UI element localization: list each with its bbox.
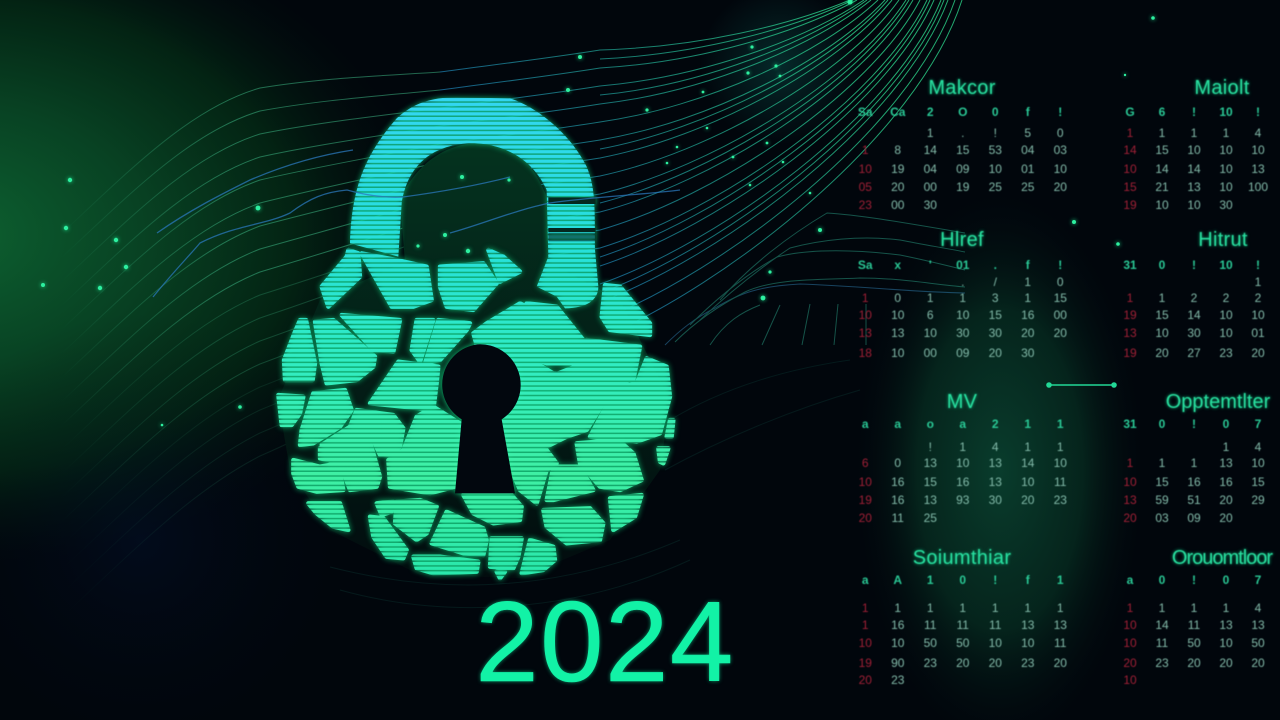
calendar panel: top right: 15 bbox=[1123, 180, 1137, 194]
calendar panel: bottom right: 10 bbox=[1219, 636, 1233, 650]
calendar panel: second row left: 30 bbox=[956, 326, 969, 340]
calendar panel: bottom right: 0 bbox=[1159, 573, 1165, 587]
calendar panel: top left: 5 bbox=[1024, 126, 1031, 140]
second line bundle near the pinch point bbox=[665, 213, 965, 345]
calendar panel: bottom left: 20 bbox=[989, 656, 1002, 670]
calendar panel: top right: 14 bbox=[1155, 162, 1169, 176]
dark backing inside the padlock bbox=[278, 143, 670, 578]
calendar panel: top left: Sa bbox=[858, 105, 873, 119]
calendar panel: bottom right: 10 bbox=[1123, 618, 1137, 632]
calendar panel: top left: 00 bbox=[924, 180, 937, 194]
calendar panel: third row left: a bbox=[894, 417, 901, 431]
calendar panel: top left: 1 bbox=[862, 143, 869, 157]
calendar panel: bottom right: 10 bbox=[1123, 673, 1137, 687]
calendar panel: second row right: 1 bbox=[1127, 291, 1133, 305]
calendar panel: third row left: 25 bbox=[924, 511, 937, 525]
calendar panel: second row left: 16 bbox=[1021, 308, 1034, 322]
calendar panel: third row right: 03 bbox=[1155, 511, 1169, 525]
calendar panel: second row right: 19 bbox=[1123, 346, 1137, 360]
padlock body shards bbox=[278, 250, 673, 578]
calendar panel: second row right: 2 bbox=[1255, 291, 1261, 305]
calendar panel: third row right: 15 bbox=[1155, 475, 1169, 489]
calendar panel: bottom right: 13 bbox=[1251, 618, 1265, 632]
calendar panel: second row left: 13 bbox=[891, 326, 904, 340]
calendar panel: second row left: 20 bbox=[1054, 326, 1067, 340]
calendar panel: top left: . bbox=[961, 126, 964, 140]
calendar panel: second row left: 0 bbox=[1057, 275, 1064, 289]
calendar panel: second row left: 18 bbox=[859, 346, 872, 360]
calendar panel: top left: 53 bbox=[989, 143, 1002, 157]
day grid bbox=[858, 105, 1068, 212]
calendar panel: third row left: 13 bbox=[989, 456, 1002, 470]
calendar panel: second row left: 0 bbox=[894, 291, 901, 305]
calendar panel: top left: 8 bbox=[894, 143, 901, 157]
calendar panel: second row right: 1 bbox=[1255, 275, 1261, 289]
calendar panel: top left: 09 bbox=[956, 162, 969, 176]
calendar panel: top right: 4 bbox=[1255, 126, 1261, 140]
calendar panel: second row left: 1 bbox=[927, 291, 934, 305]
calendar panel: second row left: 15 bbox=[1054, 291, 1067, 305]
calendar panel: second row left: 10 bbox=[924, 326, 937, 340]
calendar panel: third row left: 15 bbox=[924, 475, 937, 489]
calendar panel: bottom right: 23 bbox=[1155, 656, 1169, 670]
day grid bbox=[858, 573, 1068, 687]
year heading: 2024 bbox=[475, 579, 735, 706]
calendar panel: third row left: 10 bbox=[956, 456, 969, 470]
calendar panel: second row right: 10 bbox=[1219, 326, 1233, 340]
calendar panel: second row left: / bbox=[994, 275, 997, 289]
calendar panel: second row left: 6 bbox=[927, 308, 934, 322]
calendar panel: top right: 14 bbox=[1187, 162, 1201, 176]
calendar panel: second row left: 1 bbox=[1024, 291, 1031, 305]
calendar panel: third row left: 14 bbox=[1021, 456, 1034, 470]
calendar panel: bottom left: 23 bbox=[891, 673, 904, 687]
calendar panel: second row left: . bbox=[994, 258, 997, 272]
calendar panel: third row right: 1 bbox=[1223, 440, 1229, 454]
calendar panel: bottom left: 20 bbox=[1054, 656, 1067, 670]
calendar panel: bottom right: 20 bbox=[1187, 656, 1201, 670]
calendar panel: top right: 6 bbox=[1159, 105, 1165, 119]
calendar panel: second row left: Sa bbox=[858, 258, 873, 272]
calendar panel: second row right: 15 bbox=[1155, 308, 1169, 322]
calendar panel: third row left: 1 bbox=[1024, 440, 1031, 454]
calendar panel: bottom left: 10 bbox=[859, 636, 872, 650]
calendar panel: third row right: 16 bbox=[1187, 475, 1201, 489]
calendar panel: bottom left: 20 bbox=[859, 673, 872, 687]
calendar panel: top right: 1 bbox=[1127, 126, 1133, 140]
calendar panel: top left: 10 bbox=[989, 162, 1002, 176]
calendar panel: top left: 25 bbox=[1021, 180, 1034, 194]
calendar panel: top right: 10 bbox=[1155, 198, 1169, 212]
calendar panel: second row left: 10 bbox=[891, 308, 904, 322]
calendar panel: top left: ! bbox=[994, 126, 997, 140]
calendar panel: bottom right: 13 bbox=[1219, 618, 1233, 632]
calendar panel: third row right: 15 bbox=[1251, 475, 1265, 489]
calendar panel: top right: ! bbox=[1256, 105, 1260, 119]
calendar panel: bottom right: 50 bbox=[1187, 636, 1201, 650]
calendar panel: third row left: 10 bbox=[1054, 456, 1067, 470]
calendar panel: top left: Ca bbox=[890, 105, 905, 119]
calendar panel: second row right: 0 bbox=[1159, 258, 1165, 272]
calendar panel: bottom left: 0 bbox=[959, 573, 966, 587]
calendar panel: bottom left: 1 bbox=[1057, 601, 1064, 615]
calendar panel: bottom right: 7 bbox=[1255, 573, 1261, 587]
calendar panel: bottom left: 13 bbox=[1054, 618, 1067, 632]
calendar panel: bottom left: 1 bbox=[927, 601, 934, 615]
calendar panel: third row left: 16 bbox=[891, 475, 904, 489]
calendar panel: second row right: 01 bbox=[1251, 326, 1265, 340]
calendar panel: second row left: 10 bbox=[956, 308, 969, 322]
calendar panel: top right: 10 bbox=[1123, 162, 1137, 176]
calendar panel: third row right: 1 bbox=[1159, 456, 1165, 470]
calendar panel: top right: 10 bbox=[1219, 105, 1233, 119]
calendar panel: top right: 10 bbox=[1219, 143, 1233, 157]
calendar panel: third row left: o bbox=[927, 417, 934, 431]
calendar panel: third row left: 30 bbox=[989, 493, 1002, 507]
calendar panel: second row right: ! bbox=[1256, 258, 1260, 272]
calendar panel: second row right: 30 bbox=[1187, 326, 1201, 340]
calendar panel: third row left: 11 bbox=[1054, 475, 1066, 489]
calendar panel: bottom left: 11 bbox=[957, 618, 969, 632]
calendar panel: third row left: 93 bbox=[956, 493, 969, 507]
month title: MV bbox=[947, 391, 977, 413]
calendar panel: top left: 05 bbox=[859, 180, 872, 194]
calendar panel: second row left: 20 bbox=[989, 346, 1002, 360]
calendar panel: top right: 100 bbox=[1248, 180, 1268, 194]
calendar panel: third row right: 7 bbox=[1255, 417, 1261, 431]
calendar panel: third row right: 4 bbox=[1255, 440, 1261, 454]
calendar panel: bottom right: 4 bbox=[1255, 601, 1261, 615]
calendar panel: bottom right: 11 bbox=[1156, 636, 1168, 650]
calendar panel: second row right: 20 bbox=[1155, 346, 1169, 360]
calendar panel: third row left: 13 bbox=[924, 493, 937, 507]
month title: Hlref bbox=[940, 229, 984, 251]
day grid bbox=[1123, 417, 1265, 525]
calendar panel: third row left: 4 bbox=[992, 440, 999, 454]
calendar panel: third row right: 1 bbox=[1191, 456, 1197, 470]
calendar panel: third row left: 16 bbox=[956, 475, 969, 489]
calendar panel: third row left: 1 bbox=[959, 440, 966, 454]
calendar panel: second row left: 1 bbox=[1024, 275, 1031, 289]
calendar panel: second row left: 00 bbox=[1054, 308, 1067, 322]
calendar panel: second row left: 30 bbox=[989, 326, 1002, 340]
calendar panel: top right: 13 bbox=[1187, 180, 1201, 194]
calendar panel: bottom left: 50 bbox=[956, 636, 969, 650]
calendar panel: bottom left: 20 bbox=[956, 656, 969, 670]
calendar panel: top left: 1 bbox=[927, 126, 934, 140]
calendar panel: second row right: 31 bbox=[1123, 258, 1137, 272]
calendar panel: second row left: . bbox=[961, 275, 964, 289]
calendar panel: bottom left: 1 bbox=[862, 618, 869, 632]
calendar panel: bottom left: ! bbox=[993, 573, 997, 587]
calendar panel: top right: 21 bbox=[1155, 180, 1169, 194]
calendar panel: third row left: 2 bbox=[992, 417, 999, 431]
day grid bbox=[1123, 105, 1268, 212]
calendar panel: third row left: 20 bbox=[859, 511, 872, 525]
calendar panel: second row right: 27 bbox=[1187, 346, 1201, 360]
calendar panel: third row left: 23 bbox=[1054, 493, 1067, 507]
calendar panel: top left: 25 bbox=[989, 180, 1002, 194]
calendar panel: bottom left: 10 bbox=[891, 636, 904, 650]
calendar panel: top right: 14 bbox=[1123, 143, 1137, 157]
month title: Soiumthiar bbox=[913, 547, 1011, 569]
calendar panel: top left: 23 bbox=[859, 198, 872, 212]
calendar panel: bottom right: 20 bbox=[1219, 656, 1233, 670]
calendar panel: third row right: 59 bbox=[1155, 493, 1169, 507]
calendar panel: bottom left: 90 bbox=[891, 656, 904, 670]
calendar panel: top left: 04 bbox=[924, 162, 937, 176]
calendar panel: top left: 00 bbox=[891, 198, 904, 212]
calendar panel: top right: 10 bbox=[1219, 162, 1233, 176]
calendar panel: bottom right: 1 bbox=[1191, 601, 1197, 615]
calendar panel: second row left: 1 bbox=[959, 291, 966, 305]
padlock shackle bbox=[350, 97, 598, 308]
calendar panel: top left: 30 bbox=[924, 198, 937, 212]
calendar panel: third row left: 11 bbox=[892, 511, 904, 525]
keyhole bbox=[442, 344, 521, 493]
calendar panel: bottom left: 1 bbox=[927, 573, 934, 587]
calendar panel: top left: f bbox=[1026, 105, 1030, 119]
calendar panel: bottom left: f bbox=[1026, 573, 1030, 587]
calendar panel: third row left: 10 bbox=[859, 475, 872, 489]
calendar panel: bottom left: 1 bbox=[992, 601, 999, 615]
calendar panel: third row right: 10 bbox=[1251, 456, 1265, 470]
calendar panel: second row right: ! bbox=[1192, 258, 1196, 272]
calendar panel: bottom right: 11 bbox=[1188, 618, 1200, 632]
calendar panel: top left: 10 bbox=[859, 162, 872, 176]
calendar panel: second row left: 13 bbox=[859, 326, 872, 340]
calendar panel: second row right: 1 bbox=[1159, 291, 1165, 305]
calendar panel: second row right: 10 bbox=[1219, 308, 1233, 322]
calendar panel: top right: 15 bbox=[1155, 143, 1169, 157]
calendar panel: top left: 19 bbox=[891, 162, 904, 176]
calendar panel: bottom left: 16 bbox=[891, 618, 904, 632]
calendar panel: top left: 20 bbox=[1054, 180, 1067, 194]
calendar panel: top left: 0 bbox=[992, 105, 999, 119]
calendar panel: bottom left: 50 bbox=[924, 636, 937, 650]
calendar panel: top left: 01 bbox=[1021, 162, 1034, 176]
month title: Maiolt bbox=[1194, 77, 1250, 99]
green particles bbox=[41, 0, 1155, 426]
calendar panel: second row left: x bbox=[894, 258, 901, 272]
calendar panel: top right: 1 bbox=[1191, 126, 1197, 140]
day grid bbox=[858, 417, 1068, 525]
calendar panel: third row right: 10 bbox=[1123, 475, 1137, 489]
calendar panel: bottom left: 11 bbox=[1054, 636, 1066, 650]
calendar panel: third row right: 13 bbox=[1219, 456, 1233, 470]
calendar panel: third row right: 0 bbox=[1159, 417, 1165, 431]
calendar panel: third row left: ! bbox=[929, 440, 932, 454]
calendar panel: top left: 0 bbox=[1057, 126, 1064, 140]
calendar panel: top right: 1 bbox=[1223, 126, 1229, 140]
calendar panel: top left: 04 bbox=[1021, 143, 1034, 157]
calendar panel: third row right: 09 bbox=[1187, 511, 1201, 525]
calendar panel: third row right: 13 bbox=[1123, 493, 1137, 507]
calendar panel: bottom left: 11 bbox=[989, 618, 1001, 632]
calendar panel: second row left: 10 bbox=[891, 346, 904, 360]
calendar panel: top right: ! bbox=[1192, 105, 1196, 119]
calendar panel: third row left: 19 bbox=[859, 493, 872, 507]
calendar panel: bottom right: 0 bbox=[1223, 573, 1229, 587]
calendar panel: second row left: 10 bbox=[859, 308, 872, 322]
calendar panel: second row left: ! bbox=[1058, 258, 1062, 272]
calendar panel: bottom left: 13 bbox=[1021, 618, 1034, 632]
calendar panel: second row left: 01 bbox=[956, 258, 969, 272]
calendar panel: bottom right: 20 bbox=[1251, 656, 1265, 670]
cracked padlock bbox=[272, 94, 680, 584]
calendar panel: third row right: 0 bbox=[1223, 417, 1229, 431]
calendar panel: third row right: ! bbox=[1192, 417, 1196, 431]
calendar panel: third row left: 1 bbox=[1057, 417, 1064, 431]
calendar panel: bottom left: 1 bbox=[1024, 601, 1031, 615]
calendar panel: third row right: 20 bbox=[1123, 511, 1137, 525]
calendar panel: second row right: 10 bbox=[1251, 308, 1265, 322]
calendar panel: third row left: 1 bbox=[1057, 440, 1064, 454]
calendar panel: third row right: 16 bbox=[1219, 475, 1233, 489]
calendar panel: top right: G bbox=[1125, 105, 1135, 119]
calendar panel: second row right: 13 bbox=[1123, 326, 1137, 340]
calendar panel: top right: 1 bbox=[1159, 126, 1165, 140]
calendar panel: third row left: a bbox=[959, 417, 966, 431]
calendar panel: top left: 10 bbox=[1054, 162, 1067, 176]
calendar panel: bottom right: 50 bbox=[1251, 636, 1265, 650]
calendar panel: top left: 2 bbox=[927, 105, 934, 119]
calendar panel: second row left: 30 bbox=[1021, 346, 1034, 360]
calendar panel: third row left: 20 bbox=[1021, 493, 1034, 507]
calendar panel: top right: 10 bbox=[1251, 143, 1265, 157]
calendar panel: second row left: ' bbox=[929, 258, 932, 272]
month title: Opptemtlter bbox=[1166, 391, 1270, 413]
month title: Orouomtloor bbox=[1172, 547, 1272, 569]
calendar panel: second row left: 3 bbox=[992, 291, 999, 305]
calendar panel: second row right: 2 bbox=[1223, 291, 1229, 305]
calendar panel: bottom left: a bbox=[862, 573, 869, 587]
calendar panel: bottom right: a bbox=[1127, 573, 1133, 587]
day grid bbox=[1123, 573, 1265, 687]
calendar panel: bottom left: 10 bbox=[989, 636, 1002, 650]
calendar panel: second row left: 1 bbox=[862, 291, 869, 305]
calendar panel: second row left: 09 bbox=[956, 346, 969, 360]
connector line bbox=[1047, 383, 1116, 387]
calendar panel: third row left: 13 bbox=[924, 456, 937, 470]
calendar panel: bottom left: 23 bbox=[1021, 656, 1034, 670]
calendar panel: bottom right: 14 bbox=[1155, 618, 1169, 632]
calendar panel: third row left: 1 bbox=[1024, 417, 1031, 431]
calendar panel: second row left: 20 bbox=[1021, 326, 1034, 340]
calendar panel: third row right: 20 bbox=[1219, 511, 1233, 525]
calendar panel: bottom right: 1 bbox=[1159, 601, 1165, 615]
calendar panel: third row left: 0 bbox=[894, 456, 901, 470]
calendar panel: third row left: 6 bbox=[862, 456, 869, 470]
calendar panel: bottom left: 1 bbox=[862, 601, 869, 615]
calendar panel: bottom left: 1 bbox=[894, 601, 901, 615]
calendar panel: top left: 20 bbox=[891, 180, 904, 194]
calendar panel: second row right: 14 bbox=[1187, 308, 1201, 322]
shackle dark bands bbox=[548, 197, 596, 241]
calendar panel: second row right: 2 bbox=[1191, 291, 1197, 305]
calendar panel: top right: 19 bbox=[1123, 198, 1137, 212]
calendar panel: top right: 30 bbox=[1219, 198, 1233, 212]
calendar panel: third row right: 51 bbox=[1187, 493, 1201, 507]
calendar panel: third row left: 16 bbox=[891, 493, 904, 507]
calendar panel: bottom left: A bbox=[893, 573, 902, 587]
calendar panel: top right: 13 bbox=[1251, 162, 1265, 176]
month title: Makcor bbox=[928, 77, 996, 99]
day grid bbox=[1123, 258, 1265, 360]
calendar panel: bottom left: 23 bbox=[924, 656, 937, 670]
calendar panel: third row right: 29 bbox=[1251, 493, 1265, 507]
calendar panel: bottom left: 19 bbox=[859, 656, 872, 670]
calendar panel: second row right: 20 bbox=[1251, 346, 1265, 360]
calendar panel: top left: 19 bbox=[956, 180, 969, 194]
calendar panel: second row right: 19 bbox=[1123, 308, 1137, 322]
calendar panel: top left: ! bbox=[1058, 105, 1062, 119]
calendar panel: second row left: 15 bbox=[989, 308, 1002, 322]
calendar panel: third row left: 10 bbox=[1021, 475, 1034, 489]
calendar panel: top left: 14 bbox=[924, 143, 937, 157]
calendar panel: third row right: 20 bbox=[1219, 493, 1233, 507]
calendar panel: second row right: 23 bbox=[1219, 346, 1233, 360]
day grid bbox=[858, 258, 1068, 360]
calendar panel: bottom right: 1 bbox=[1223, 601, 1229, 615]
calendar panel: bottom right: ! bbox=[1192, 573, 1196, 587]
calendar panel: bottom left: 11 bbox=[924, 618, 936, 632]
calendar panel: third row left: a bbox=[862, 417, 869, 431]
calendar panel: bottom right: 10 bbox=[1123, 636, 1137, 650]
calendar panel: top right: 10 bbox=[1219, 180, 1233, 194]
calendar panel: top left: O bbox=[958, 105, 967, 119]
calendar panel: bottom left: 1 bbox=[1057, 573, 1064, 587]
calendar panel: bottom right: 1 bbox=[1127, 601, 1133, 615]
calendar panel: bottom left: 1 bbox=[959, 601, 966, 615]
calendar panel: second row right: 10 bbox=[1155, 326, 1169, 340]
calendar panel: second row right: 10 bbox=[1219, 258, 1233, 272]
month title: Hitrut bbox=[1198, 229, 1248, 251]
calendar panel: bottom right: 20 bbox=[1123, 656, 1137, 670]
calendar panel: bottom left: 10 bbox=[1021, 636, 1034, 650]
calendar panel: second row left: 00 bbox=[924, 346, 937, 360]
calendar panel: top left: 03 bbox=[1054, 143, 1067, 157]
calendar panel: third row right: 1 bbox=[1127, 456, 1133, 470]
calendar panel: second row left: f bbox=[1026, 258, 1030, 272]
calendar panel: third row right: 31 bbox=[1123, 417, 1137, 431]
calendar panel: top right: 10 bbox=[1187, 198, 1201, 212]
calendar panel: top left: 15 bbox=[956, 143, 969, 157]
calendar panel: third row left: 13 bbox=[989, 475, 1002, 489]
calendar panel: top right: 10 bbox=[1187, 143, 1201, 157]
